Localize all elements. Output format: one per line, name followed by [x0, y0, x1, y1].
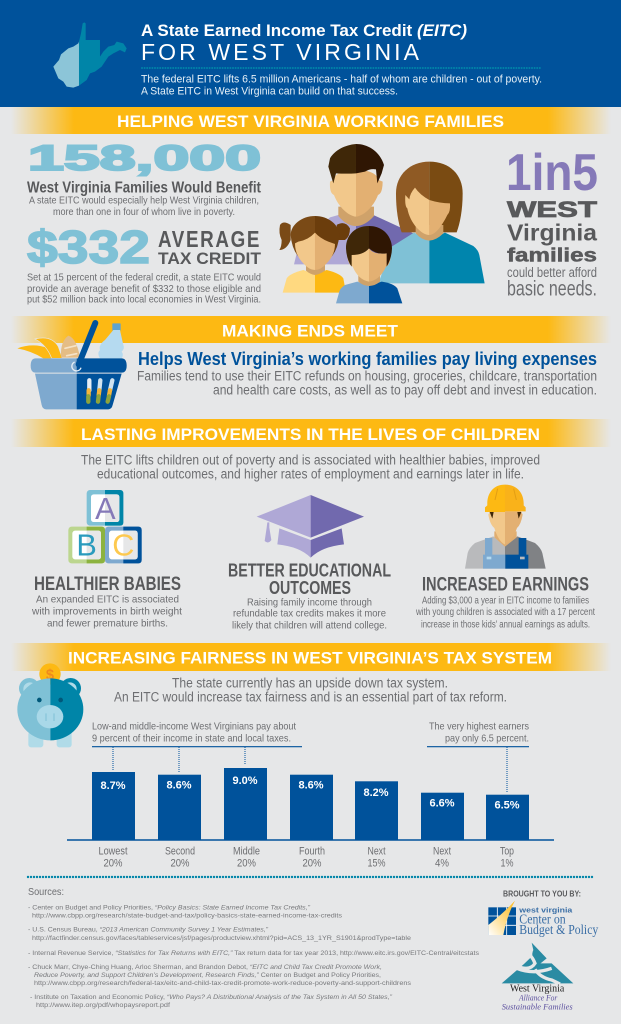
bar: next 15%: 15%: [368, 858, 386, 870]
bar: middle 20%: Middle: [233, 846, 260, 858]
intro text: [81, 452, 540, 481]
stat label: average tax credit: TAX CREDIT: [158, 249, 262, 268]
logo: West Virginia Center on Budget and Policy: Center on: [519, 912, 566, 927]
bar: lowest 20%: [92, 772, 135, 870]
sources: [28, 886, 480, 1009]
callout: highest earners: pay only 6.5 percent.: [445, 733, 529, 745]
icon: alphabet blocks: C: [112, 529, 134, 563]
credit description: Set at 15 percent of the federal credit, a state EITC would: [27, 272, 261, 284]
icon: alphabet blocks: B: [76, 529, 97, 563]
column: better educational outcomes: Raising family income through: [247, 597, 372, 609]
bar: next 15%: 8.2%: [363, 787, 389, 799]
section band: [11, 316, 611, 343]
header text: A State EITC in West Virginia can build on that success.: [141, 86, 398, 98]
stat label: average tax credit: AVERAGE: [158, 226, 261, 252]
stat: 1 in 5 families: [506, 144, 598, 301]
stat: 1 in 5 families: WEST: [507, 197, 598, 222]
stat description: more than one in four of whom live in poverty.: [53, 206, 235, 218]
icon: alphabet blocks: [68, 490, 142, 563]
callout: low and middle income: [92, 720, 302, 773]
bar: middle 20%: 20%: [237, 858, 256, 870]
bar: fourth 20%: [290, 775, 333, 870]
boy: [336, 226, 402, 303]
subtitle: FOR WEST VIRGINIA: [141, 39, 420, 65]
credit description: [27, 272, 261, 306]
sources: - Internal Revenue Service, “Statistics for Tax Returns with EITC,” Tax return data for tax year 2013, http://www.eitc.irs.gov/EITC-Central/eitcstats: [28, 950, 480, 957]
stat: $332: $332: [27, 221, 150, 273]
section band: HELPING WEST VIRGINIA WORKING FAMILIES: [117, 112, 504, 131]
sources: - Center on Budget and Policy Priorities, “Policy Basics: State Earned Income Tax Credits,”: [28, 905, 311, 912]
panel: helping working families: [11, 107, 611, 306]
logo mark: [488, 901, 516, 935]
sources: http://www.cbpp.org/research/federal-tax/eitc-and-child-tax-credit-promote-work-reduce-poverty-and-support-childrens: [34, 980, 412, 987]
icon: family: [279, 144, 485, 303]
mother: [378, 162, 485, 283]
column: better educational outcomes: OUTCOMES: [269, 578, 351, 598]
bar: second 20%: [158, 775, 201, 870]
column: increased earnings: [415, 574, 595, 631]
bar: lowest 20%: Lowest: [98, 846, 128, 858]
logo: West Virginia Alliance for Sustainable Families: Alliance For: [518, 993, 558, 1003]
logo: West Virginia Alliance for Sustainable Families: Sustainable Families: [502, 1001, 573, 1011]
bar: next 4%: 6.6%: [429, 797, 455, 809]
bar: next 4%: [421, 793, 464, 870]
stat label: average tax credit: [158, 226, 262, 268]
icon: piggy bank: $: [46, 667, 54, 683]
callout: low and middle income: Low-and middle-income West Virginians pay about: [92, 720, 296, 732]
bar: top 1%: Top: [500, 846, 514, 858]
sources: Sources:: [28, 886, 64, 898]
intro text: The EITC lifts children out of poverty and is associated with healthier babies, improved: [81, 452, 540, 467]
callout: low and middle income: 9 percent of their income in state and local taxes.: [92, 733, 291, 745]
intro text: The state currently has an upside down tax system.: [172, 676, 448, 691]
panel: lasting improvements: [11, 419, 611, 631]
header banner: [0, 0, 621, 107]
sources: - U.S. Census Bureau, “2013 American Community Survey 1 Year Estimates,”: [28, 927, 269, 934]
section band: MAKING ENDS MEET: [222, 321, 399, 340]
bar: fourth 20%: 20%: [302, 858, 322, 870]
icon: piggy bank: [17, 663, 83, 747]
sources: http://www.itep.org/pdf/whopaysreport.pdf: [36, 1002, 170, 1009]
column: healthier babies: with improvements in birth weight: [31, 605, 182, 617]
header text: [141, 74, 542, 98]
column: healthier babies: and fewer premature births.: [47, 618, 168, 630]
bar: top 1%: [486, 795, 529, 870]
section band: [11, 643, 611, 671]
column: healthier babies: An expanded EITC is associated: [36, 593, 179, 605]
section band: LASTING IMPROVEMENTS IN THE LIVES OF CHILDREN: [81, 425, 540, 444]
icon: construction worker: [465, 485, 546, 569]
bar: top 1%: 6.5%: [494, 800, 520, 812]
section band: [11, 419, 611, 447]
column: healthier babies: [31, 574, 182, 630]
column: better educational outcomes: likely that children will attend college.: [232, 619, 387, 631]
icon: alphabet blocks: A: [95, 492, 116, 526]
stat: 1 in 5 families: 1in5: [506, 144, 598, 202]
credit description: provide an average benefit of $332 to those eligible and: [27, 283, 261, 295]
column: better educational outcomes: BETTER EDUCATIONAL: [228, 561, 391, 581]
sources: http://www.cbpp.org/research/state-budget-and-tax/policy-basics-state-earned-income-tax-credits: [32, 913, 343, 920]
logo: West Virginia Center on Budget and Policy: west virginia: [518, 906, 573, 915]
bar: middle 20%: 9.0%: [232, 775, 258, 787]
brought to you by: BROUGHT TO YOU BY:: [503, 889, 581, 899]
bar: middle 20%: [224, 768, 267, 870]
sources: http://factfinder.census.gov/faces/tableservices/jsf/pages/productview.xhtml?pid=ACS_13_1YR_S1901&prodType=table: [32, 935, 411, 942]
bar: next 4%: Next: [433, 846, 451, 858]
body text: [137, 369, 597, 398]
logo: West Virginia Center on Budget and Policy: [488, 901, 598, 938]
section band: [11, 107, 611, 134]
title: A State Earned Income Tax Credit (EITC): [141, 21, 467, 40]
callout: highest earners: The very highest earners: [429, 720, 529, 732]
column: better educational outcomes: [228, 561, 391, 631]
stat: 1 in 5 families: could better afford: [507, 265, 597, 280]
intro text: [114, 676, 507, 705]
logo: West Virginia Alliance for Sustainable Families: West Virginia: [510, 984, 565, 995]
bar: fourth 20%: Fourth: [299, 846, 325, 858]
stat: 158,000: 158,000: [28, 139, 261, 178]
icon: West Virginia state map: [53, 22, 127, 88]
panel: increasing fairness: [11, 643, 611, 870]
sources: - Institute on Taxation and Economic Policy, “Who Pays? A Distributional Analysis of the Tax System in All 50 States,”: [30, 994, 393, 1001]
section band: INCREASING FAIRNESS IN WEST VIRGINIA’S TAX SYSTEM: [68, 648, 552, 667]
bar: top 1%: 1%: [500, 858, 514, 870]
callout: highest earners: [427, 720, 529, 793]
sources: Reduce Poverty, and Support Children’s Development, Research Finds,” Center on Budget and Policy Priorities,: [34, 972, 381, 979]
column: healthier babies: HEALTHIER BABIES: [34, 574, 181, 595]
bar: next 15%: Next: [368, 846, 386, 858]
bar: next 4%: 4%: [435, 858, 449, 870]
stat: 1 in 5 families: Virginia: [507, 220, 597, 246]
girl: [279, 216, 350, 293]
credit description: put $52 million back into local economies in West Virginia.: [27, 294, 261, 306]
bar: lowest 20%: 20%: [104, 858, 123, 870]
intro text: educational outcomes, and higher rates of employment and earnings later in life.: [97, 466, 524, 481]
bar: lowest 20%: 8.7%: [100, 780, 126, 792]
bar: second 20%: 20%: [170, 858, 190, 870]
icon: grocery basket: [17, 323, 127, 409]
intro text: An EITC would increase tax fairness and is an essential part of tax reform.: [114, 690, 507, 705]
stat label: West Virginia Families Would Benefit: [27, 180, 261, 197]
logo: West Virginia Alliance for Sustainable Families: [502, 943, 573, 1011]
father: [294, 144, 413, 264]
stat description: A state EITC would especially help West Virginia children,: [29, 194, 259, 206]
bar: fourth 20%: 8.6%: [298, 780, 324, 792]
bar chart: [67, 768, 554, 870]
stat description: [29, 194, 259, 218]
column: better educational outcomes: refundable tax credits makes it more: [233, 608, 386, 620]
bar: second 20%: 8.6%: [166, 780, 192, 792]
panel: making ends meet: [11, 316, 611, 409]
logo: West Virginia Center on Budget and Policy: Budget & Policy: [519, 923, 598, 938]
bar: next 15%: [355, 781, 398, 870]
stat: 1 in 5 families: families: [507, 246, 597, 267]
icon: graduation cap: [257, 495, 364, 558]
sources: - Chuck Marr, Chye-Ching Huang, Arloc Sherman, and Brandon Debot, “EITC and Child Tax Credit Promote Work,: [28, 964, 382, 971]
logo mountain mark: [502, 943, 573, 984]
bar: second 20%: Second: [165, 846, 195, 858]
header text: The federal EITC lifts 6.5 million Americans - half of whom are children - out of poverty.: [141, 74, 542, 86]
